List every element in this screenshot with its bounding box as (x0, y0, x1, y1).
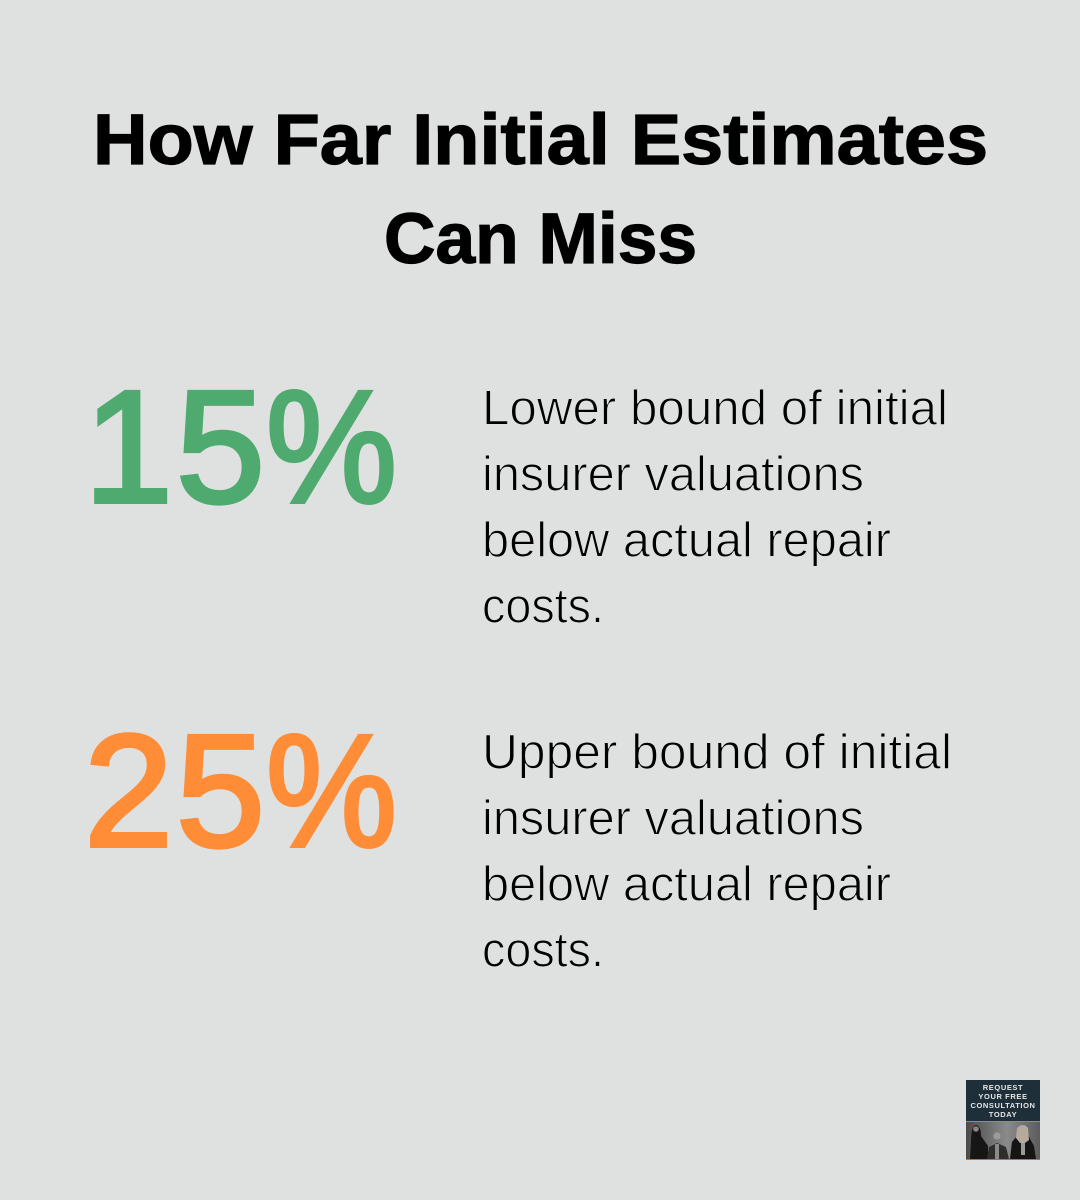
badge text: YOUR FREE (978, 1092, 1028, 1101)
description: lower bound: below actual repair (482, 513, 891, 567)
description: upper bound (482, 725, 952, 977)
number: 25%: 25 (84, 701, 265, 880)
description: upper bound: costs. (482, 923, 604, 977)
number: 25% (84, 701, 397, 880)
description: upper bound: insurer valuations (482, 791, 864, 845)
number: 15%: 15 (84, 357, 265, 536)
badge text (970, 1083, 1036, 1119)
title: Can Miss (384, 200, 697, 279)
badge text: CONSULTATION (970, 1101, 1036, 1110)
badge text: TODAY (989, 1110, 1017, 1119)
description: lower bound: Lower bound of initial (482, 381, 948, 435)
number: 25%: % (266, 701, 397, 880)
description: upper bound: Upper bound of initial (482, 725, 952, 779)
description: lower bound: costs. (482, 579, 604, 633)
number: 15%: % (266, 357, 397, 536)
stat: 25% upper bound (84, 701, 952, 977)
title (93, 101, 988, 279)
badge text: REQUEST (983, 1083, 1023, 1092)
title: How Far Initial Estimates (93, 101, 988, 180)
description: lower bound (482, 381, 948, 633)
description: upper bound: below actual repair (482, 857, 891, 911)
number: 15% (84, 357, 397, 536)
stat: 15% lower bound (84, 357, 948, 633)
description: lower bound: insurer valuations (482, 447, 864, 501)
badge photo: three people (970, 1125, 1036, 1159)
badge: request your free consultation (966, 1080, 1040, 1160)
